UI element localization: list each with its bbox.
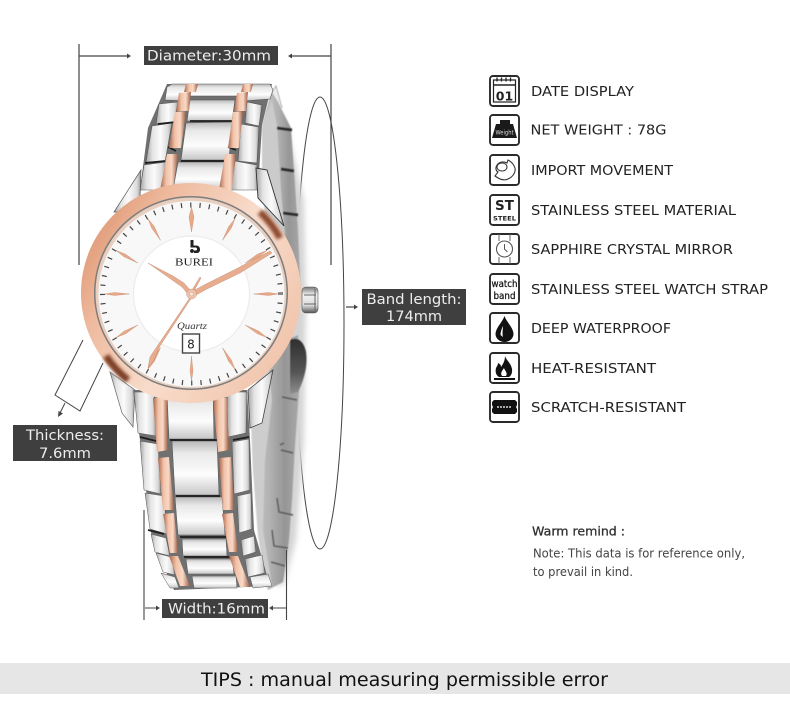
feature: sapphire crystal mirror (490, 234, 733, 264)
tips bar: TIPS : manual measuring permissible error (200, 669, 608, 691)
feature: net weight: NET WEIGHT : 78G (530, 122, 666, 138)
feature: stainless steel watch strap: watch (492, 279, 518, 290)
note text: to prevail in kind. (533, 565, 633, 579)
watch (81, 84, 318, 590)
feature: stainless steel material: STEEL (493, 214, 516, 222)
side of bracelet upper (262, 86, 301, 300)
band length label: Band length: (366, 292, 462, 308)
feature: stainless steel material: ST (495, 198, 515, 214)
feature: scratch-resistant: SCRATCH-RESISTANT (531, 400, 687, 416)
thickness label (13, 425, 117, 462)
crown (302, 287, 318, 313)
feature: deep waterproof (490, 313, 671, 343)
note text (533, 546, 745, 579)
feature: net weight (490, 115, 666, 145)
feature: heat-resistant (490, 353, 657, 383)
diameter dimension (79, 44, 331, 265)
date window (182, 334, 200, 353)
width label: Width:16mm (168, 602, 265, 618)
thickness label: Thickness: (25, 428, 104, 444)
lower bracelet base (133, 390, 270, 590)
feature: stainless steel watch strap (490, 274, 768, 304)
side of bracelet lower (250, 335, 307, 590)
diameter label: Diameter:30mm (147, 48, 271, 64)
feature list (490, 76, 768, 422)
hands (148, 251, 272, 368)
feature: import movement: IMPORT MOVEMENT (531, 163, 674, 179)
thickness label: 7.6mm (39, 446, 91, 462)
feature: scratch-resistant (490, 392, 687, 422)
brand logo (190, 240, 200, 253)
band length label: 174mm (386, 309, 442, 325)
feature: stainless steel material (490, 195, 737, 225)
minute ticks (102, 205, 280, 383)
tips bar (0, 663, 790, 694)
feature: stainless steel watch strap: band (494, 291, 516, 302)
feature: net weight: Weight (496, 130, 514, 136)
band length ellipse (296, 97, 344, 549)
upper bracelet base (140, 84, 272, 190)
feature: date display (490, 76, 635, 106)
lugs (110, 168, 284, 428)
clasp (290, 339, 307, 394)
feature: date display: DATE DISPLAY (531, 84, 635, 100)
note text: Note: This data is for reference only, (533, 546, 745, 560)
upper rose stripes (160, 84, 253, 190)
band length dimension (346, 289, 466, 325)
feature: sapphire crystal mirror: SAPPHIRE CRYSTAL MIRROR (531, 242, 733, 258)
thickness dimension (13, 340, 117, 462)
feature: stainless steel watch strap: STAINLESS STEEL WATCH STRAP (531, 282, 768, 298)
bezel (81, 183, 301, 403)
upper bracelet links (140, 84, 273, 190)
feature: deep waterproof: DEEP WATERPROOF (531, 321, 671, 337)
feature: import movement (490, 155, 674, 185)
quartz label: Quartz (177, 322, 207, 332)
feature: stainless steel material: STAINLESS STEEL MATERIAL (531, 203, 737, 219)
width dimension (144, 510, 286, 620)
lower gap shadows (140, 437, 249, 557)
dial (98, 201, 284, 387)
lower bracelet links (134, 392, 272, 588)
brand name: BUREI (175, 256, 213, 268)
lower rose stripes (153, 398, 250, 587)
feature: heat-resistant: HEAT-RESISTANT (531, 361, 657, 377)
bracelet soft shadow (275, 120, 306, 585)
warm remind heading: Warm remind : (532, 524, 625, 538)
band length label (362, 289, 466, 325)
feature: date display: 01 (496, 88, 513, 104)
hour markers (104, 207, 278, 381)
date window: 8 (187, 338, 195, 352)
upper gap shadows (145, 121, 236, 163)
